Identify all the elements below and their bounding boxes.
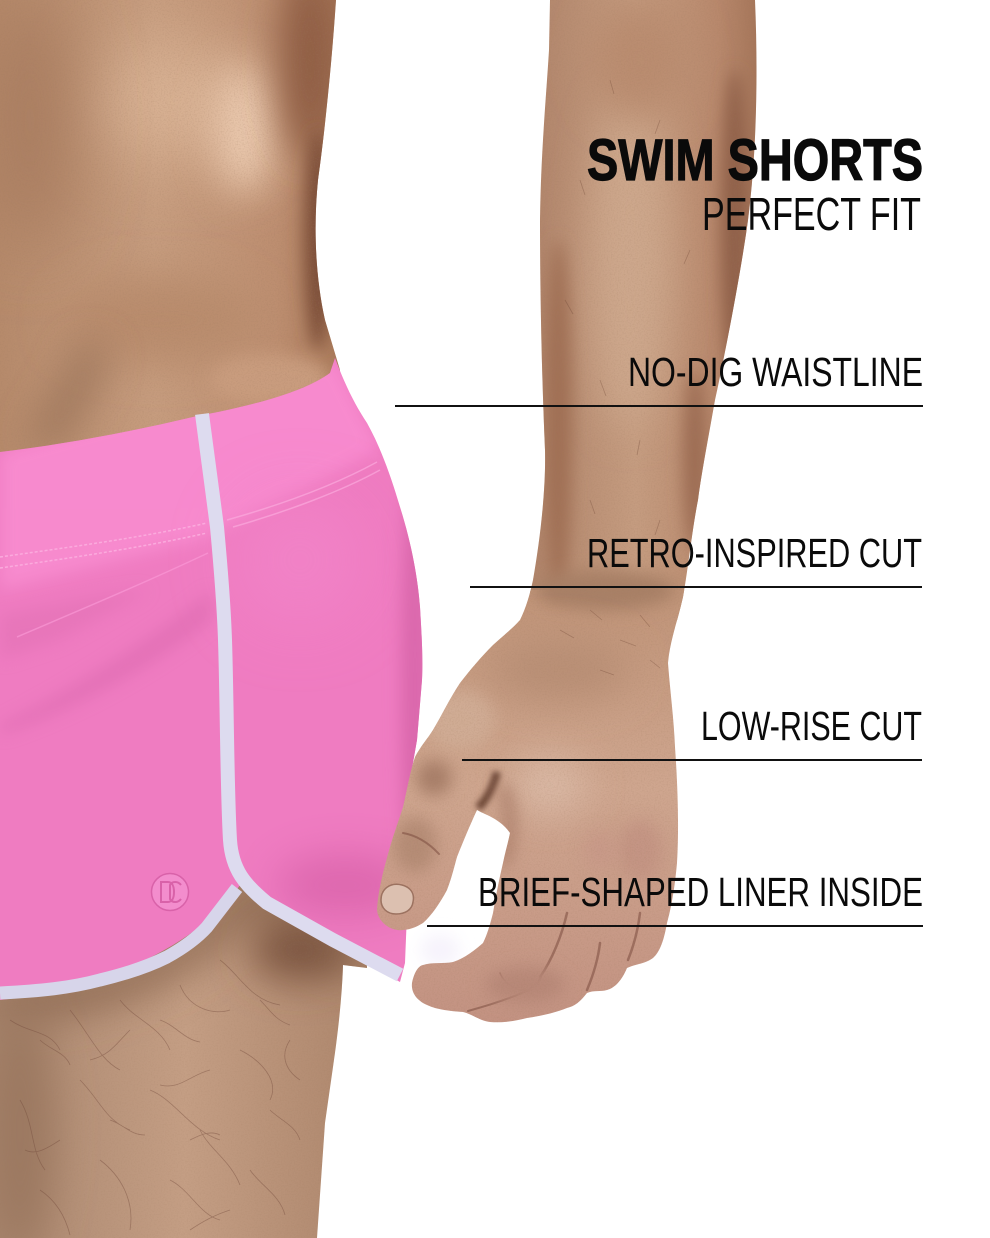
upper arm and forearm with hand [370, 0, 770, 1030]
leg hair [10, 960, 300, 1235]
pink swim shorts [0, 350, 430, 1000]
faint smudge beside the thumb [420, 934, 460, 966]
callout: low-rise cut: LOW-RISE CUT [701, 703, 922, 749]
white piping trim [0, 888, 237, 993]
thigh below the shorts [0, 860, 370, 1238]
round brand logo [152, 874, 188, 910]
finger gaps and knuckles [403, 833, 640, 1011]
man's torso [0, 0, 345, 475]
arm hair [560, 80, 690, 675]
waistband stitching [0, 462, 380, 568]
waistband brighter tone [0, 358, 380, 590]
thumb shading [416, 760, 452, 796]
thumbnail [381, 884, 413, 914]
fabric folds [60, 606, 206, 704]
subheading: perfect fit: PERFECT FIT [702, 188, 921, 240]
